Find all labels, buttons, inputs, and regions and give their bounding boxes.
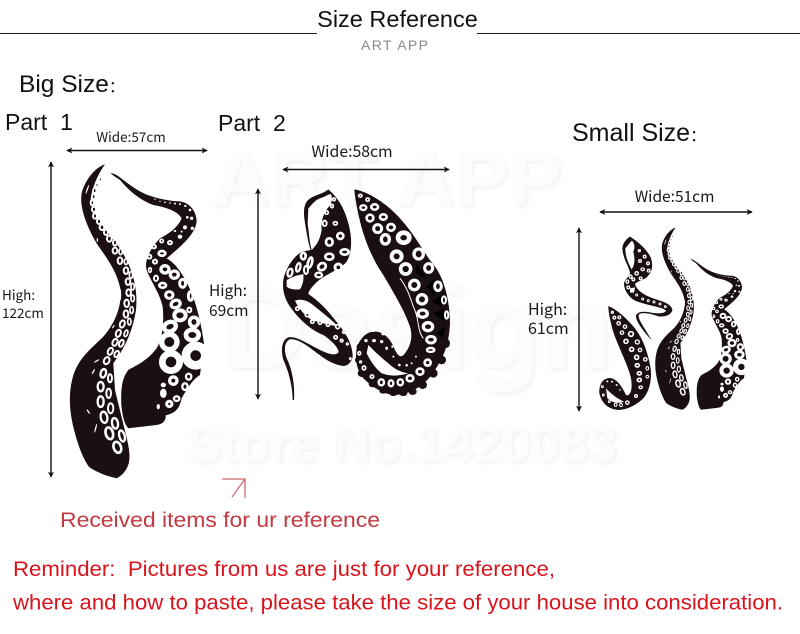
part 1 tentacles [70,164,205,478]
part 2 height dimension: 69cm [209,299,248,321]
small size height dimension: 61cm [528,315,569,339]
reminder text: Reminder: Pictures from us are just for your reference, [13,557,555,581]
small size height dimension [528,228,579,411]
reminder text: where and how to paste, please take the size of your house into consideration. [12,590,783,614]
watermark [187,137,619,474]
reminder text [12,557,783,614]
heading: part 1: Part 1 [5,109,73,135]
part 2 width dimension: Wide:58cm [311,139,393,162]
part 2 height dimension [209,189,258,399]
part 1 height dimension [2,162,51,477]
caption: received items: Received items for ur reference [60,509,380,532]
part 2 height dimension: High: [209,279,247,301]
part 1 height dimension: High: [2,284,35,304]
watermark: Store No.1420083 [189,418,619,474]
heading: part 2: Part 2 [218,110,286,136]
watermark: ART APP [214,139,564,224]
watermark: Design [224,264,614,396]
heading: small size: Small Size： [572,119,706,147]
header: size reference: ART APP [361,37,428,53]
header: size reference [0,6,800,53]
watermark: ART APP [212,137,562,222]
part 2 tentacles [282,189,450,400]
icon: red corner arrow [222,479,245,498]
part 1 height dimension: 122cm [2,302,44,322]
watermark: Design [222,262,612,394]
part 1 width dimension: Wide:57cm [96,126,166,146]
part 1 width dimension [67,126,207,150]
small size height dimension: High: [528,296,567,320]
heading: big size: Big Size： [19,71,125,98]
watermark: Store No.1420083 [187,416,617,472]
header: size reference: Size Reference [317,6,478,32]
small size width dimension: Wide:51cm [635,185,714,207]
small size tentacles [599,228,747,410]
